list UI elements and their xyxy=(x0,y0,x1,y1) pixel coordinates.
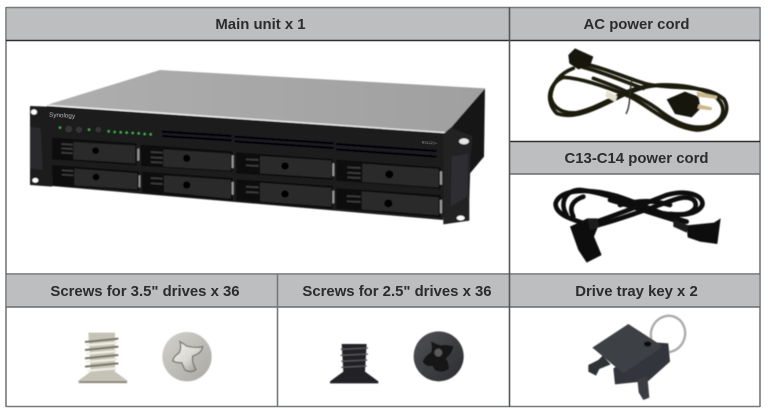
NEMA plug body xyxy=(667,92,701,117)
tray lock keyholes xyxy=(92,147,393,207)
white cable label xyxy=(605,91,617,102)
screw head view xyxy=(414,331,464,381)
image: C13-C14 power cord xyxy=(556,190,721,263)
coiled cable xyxy=(556,190,702,225)
heading: screws for 2.5 inch drives: Screws for 2.5" drives x 36 xyxy=(302,284,492,300)
cable tie xyxy=(626,77,633,114)
tray latches xyxy=(137,149,442,213)
heading: C13-C14 power cord: C13-C14 power cord xyxy=(565,151,708,167)
heading: drive tray key: Drive tray key x 2 xyxy=(575,284,698,300)
screw head view xyxy=(162,332,212,381)
status LEDs xyxy=(59,126,152,135)
image: black screw for 2.5 inch drives xyxy=(330,331,464,383)
key ring xyxy=(646,311,690,357)
drive tray handles xyxy=(73,142,439,215)
back key xyxy=(613,342,670,384)
power and beep buttons xyxy=(66,126,100,132)
front panel xyxy=(47,106,447,220)
image: silver screw for 3.5 inch drives xyxy=(78,332,212,383)
C14 connector xyxy=(687,218,721,244)
key hole xyxy=(644,341,651,347)
vents xyxy=(162,132,437,157)
image: rack-mounted NAS main unit xyxy=(30,70,485,224)
front key xyxy=(592,324,662,373)
right side panel xyxy=(443,88,485,193)
heading: main unit: Main unit x 1 xyxy=(215,17,306,33)
right rack ear xyxy=(443,128,473,224)
screw side view xyxy=(330,344,378,383)
screw side view xyxy=(78,333,127,383)
left rack ear xyxy=(30,106,52,187)
top cover xyxy=(47,70,485,133)
image: AC power cord xyxy=(550,48,727,130)
coiled cable xyxy=(550,63,727,130)
back key stem xyxy=(637,376,649,400)
front key stem xyxy=(588,356,611,376)
heading: screws for 3.5 inch drives: Screws for 3.5" drives x 36 xyxy=(50,284,240,300)
C13 angled connector xyxy=(570,218,602,263)
model label: RS1221+ xyxy=(422,141,437,145)
header bands xyxy=(7,8,759,307)
brand label: Synology xyxy=(49,112,76,120)
drive bays xyxy=(52,138,441,217)
image: drive tray keys xyxy=(588,311,690,400)
C13 connector xyxy=(568,48,593,69)
tray grip slots xyxy=(61,144,361,202)
heading: AC power cord: AC power cord xyxy=(584,17,689,33)
plug blades xyxy=(697,92,717,110)
